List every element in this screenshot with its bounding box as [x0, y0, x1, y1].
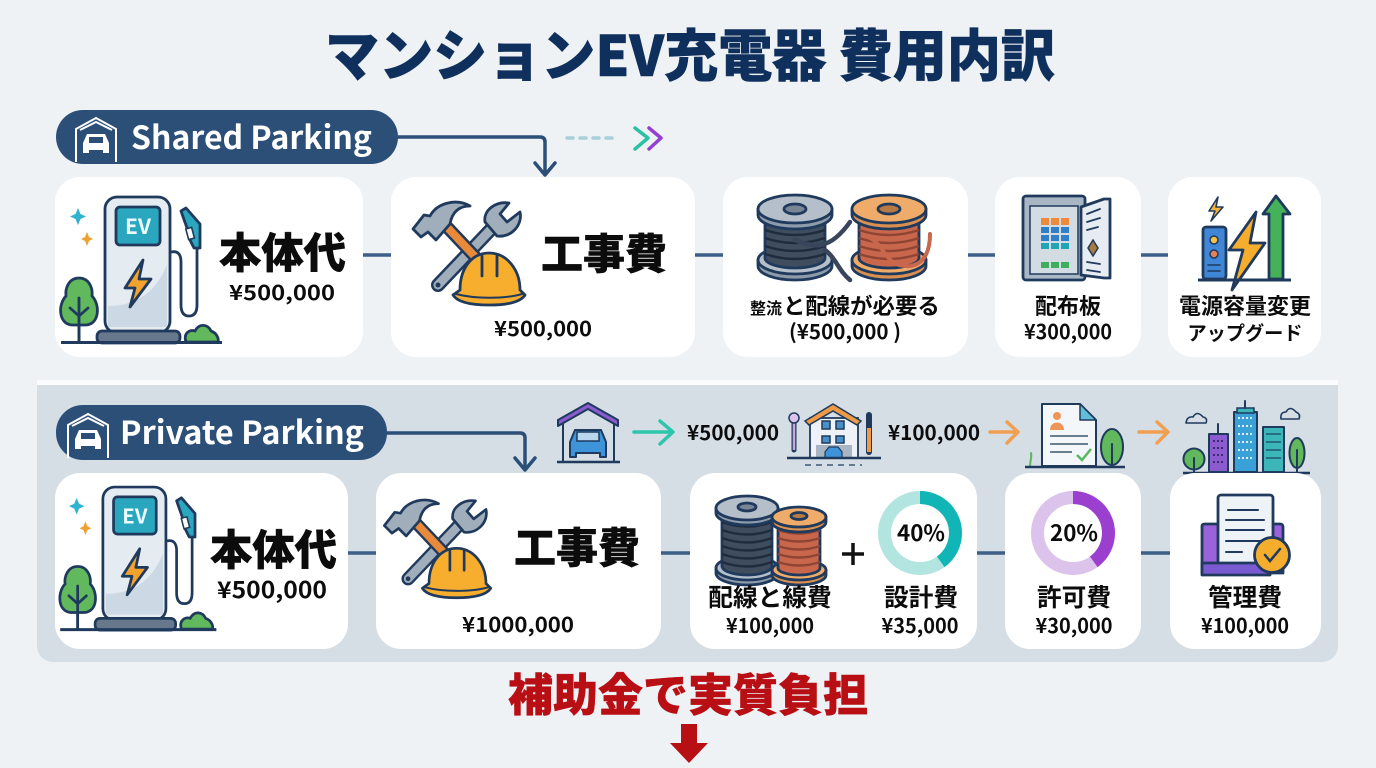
- subsidy heading: 補助金で実質負担: [508, 659, 868, 724]
- arrow: down red: [670, 724, 708, 763]
- price: 500,000: ¥500,000: [687, 416, 779, 446]
- donut chart: 20%: 20%: [1050, 516, 1098, 548]
- icon: document on laptop with check badge: [1202, 495, 1290, 575]
- icon: hammer, wrench and helmet: [384, 500, 491, 598]
- label and price: design: 設計費: [884, 578, 958, 614]
- label and price: ¥500,000: [229, 276, 335, 306]
- label and price: design: ¥35,000: [882, 609, 958, 639]
- icon: EV charger: [60, 487, 216, 630]
- pill heading: Private Parking: [56, 405, 387, 460]
- card: 工事費 shared: [391, 177, 695, 357]
- icon: two cable spools: [758, 195, 930, 280]
- label and price: wiring: ¥100,000: [726, 609, 814, 639]
- label and price: 本体代: [219, 220, 346, 281]
- card: management fee: [1170, 473, 1321, 649]
- icon: distribution panel: [1023, 196, 1110, 280]
- label and price: [494, 221, 667, 342]
- icon: EV charger: [61, 197, 222, 343]
- section: private parking: [37, 380, 1338, 662]
- donut chart: 20%: [1038, 498, 1108, 568]
- arrow: teal: [634, 421, 673, 444]
- arrow: orange: [1139, 422, 1168, 443]
- label and price: ¥1000,000: [462, 608, 574, 638]
- label and price: 許可費: [1037, 578, 1111, 614]
- card: permit fee: [1005, 473, 1141, 649]
- icon: garage with blue car: [557, 403, 620, 462]
- price: 100,000: ¥100,000: [888, 416, 980, 446]
- pill label: Shared Parking: [131, 113, 372, 159]
- card: 本体代 shared: [55, 177, 363, 357]
- icon: two cable spools: [716, 496, 826, 585]
- icon: power upgrade: [1198, 196, 1291, 290]
- arrow: private pill to construction card: [384, 433, 535, 470]
- icon: hammer, wrench and helmet: [413, 202, 525, 305]
- connector lines: private row: [348, 551, 1170, 555]
- arrow: orange: [990, 422, 1018, 443]
- title: マンションEV充電器 費用内訳: [325, 12, 1055, 93]
- label: [1179, 289, 1311, 346]
- icon: house with tools: [787, 404, 881, 465]
- decorative flow: dashes and chevrons: [567, 128, 661, 149]
- label and price: [1024, 289, 1112, 345]
- label and price: ¥300,000: [1024, 315, 1112, 345]
- icon: city skyline: [1183, 401, 1310, 473]
- label and price: ¥100,000: [1201, 609, 1289, 639]
- pill label: Private Parking: [120, 408, 364, 454]
- label and price: 工事費: [541, 221, 667, 282]
- icon: EV charger: EV: [125, 211, 152, 241]
- label and price: [210, 517, 337, 605]
- label and price: [462, 515, 640, 638]
- label and price: (¥500,000 ): [789, 315, 901, 345]
- label and price: [1036, 578, 1112, 639]
- label and price: 配布板: [1035, 289, 1101, 321]
- panel background: [37, 380, 1338, 662]
- icon: garage with car: [68, 414, 108, 458]
- pill heading: Shared Parking: [56, 110, 398, 164]
- card: 工事費 private: [376, 473, 661, 649]
- label and price: と配線が必要る: [783, 289, 940, 321]
- card: power capacity upgrade: [1168, 177, 1321, 357]
- label: 電源容量変更: [1179, 289, 1311, 321]
- plus sign: [842, 543, 864, 565]
- donut chart: 40%: 40%: [897, 516, 945, 548]
- label and price: 工事費: [514, 515, 640, 576]
- card: wiring shared: [723, 177, 968, 357]
- icon: permit document with tree: [1025, 404, 1125, 467]
- label and price: 管理費: [1208, 578, 1282, 614]
- label and price: [1201, 578, 1289, 639]
- label and price: ¥500,000: [494, 312, 592, 342]
- card: wiring plus design: [690, 473, 977, 649]
- card: 本体代 private: [55, 473, 348, 649]
- label and price: ¥30,000: [1036, 609, 1112, 639]
- icon: EV charger: EV: [122, 499, 148, 529]
- label and price: design: [882, 578, 958, 639]
- label and price: wiring: [708, 578, 832, 639]
- label and price: wiring: 配線と線費: [708, 578, 832, 614]
- label and price: ¥500,000: [217, 571, 327, 605]
- section: shared parking: [55, 110, 1321, 357]
- card: distribution board: [995, 177, 1141, 357]
- label and price: 整流: [750, 295, 782, 319]
- connector lines: shared row: [363, 253, 1168, 257]
- label and price: [750, 289, 940, 345]
- label and price: 本体代: [210, 517, 337, 578]
- label: アップグード: [1187, 318, 1303, 346]
- donut chart: 40%: [884, 498, 956, 568]
- icon: garage with car: [76, 118, 116, 162]
- arrow: shared pill to construction card: [395, 137, 555, 175]
